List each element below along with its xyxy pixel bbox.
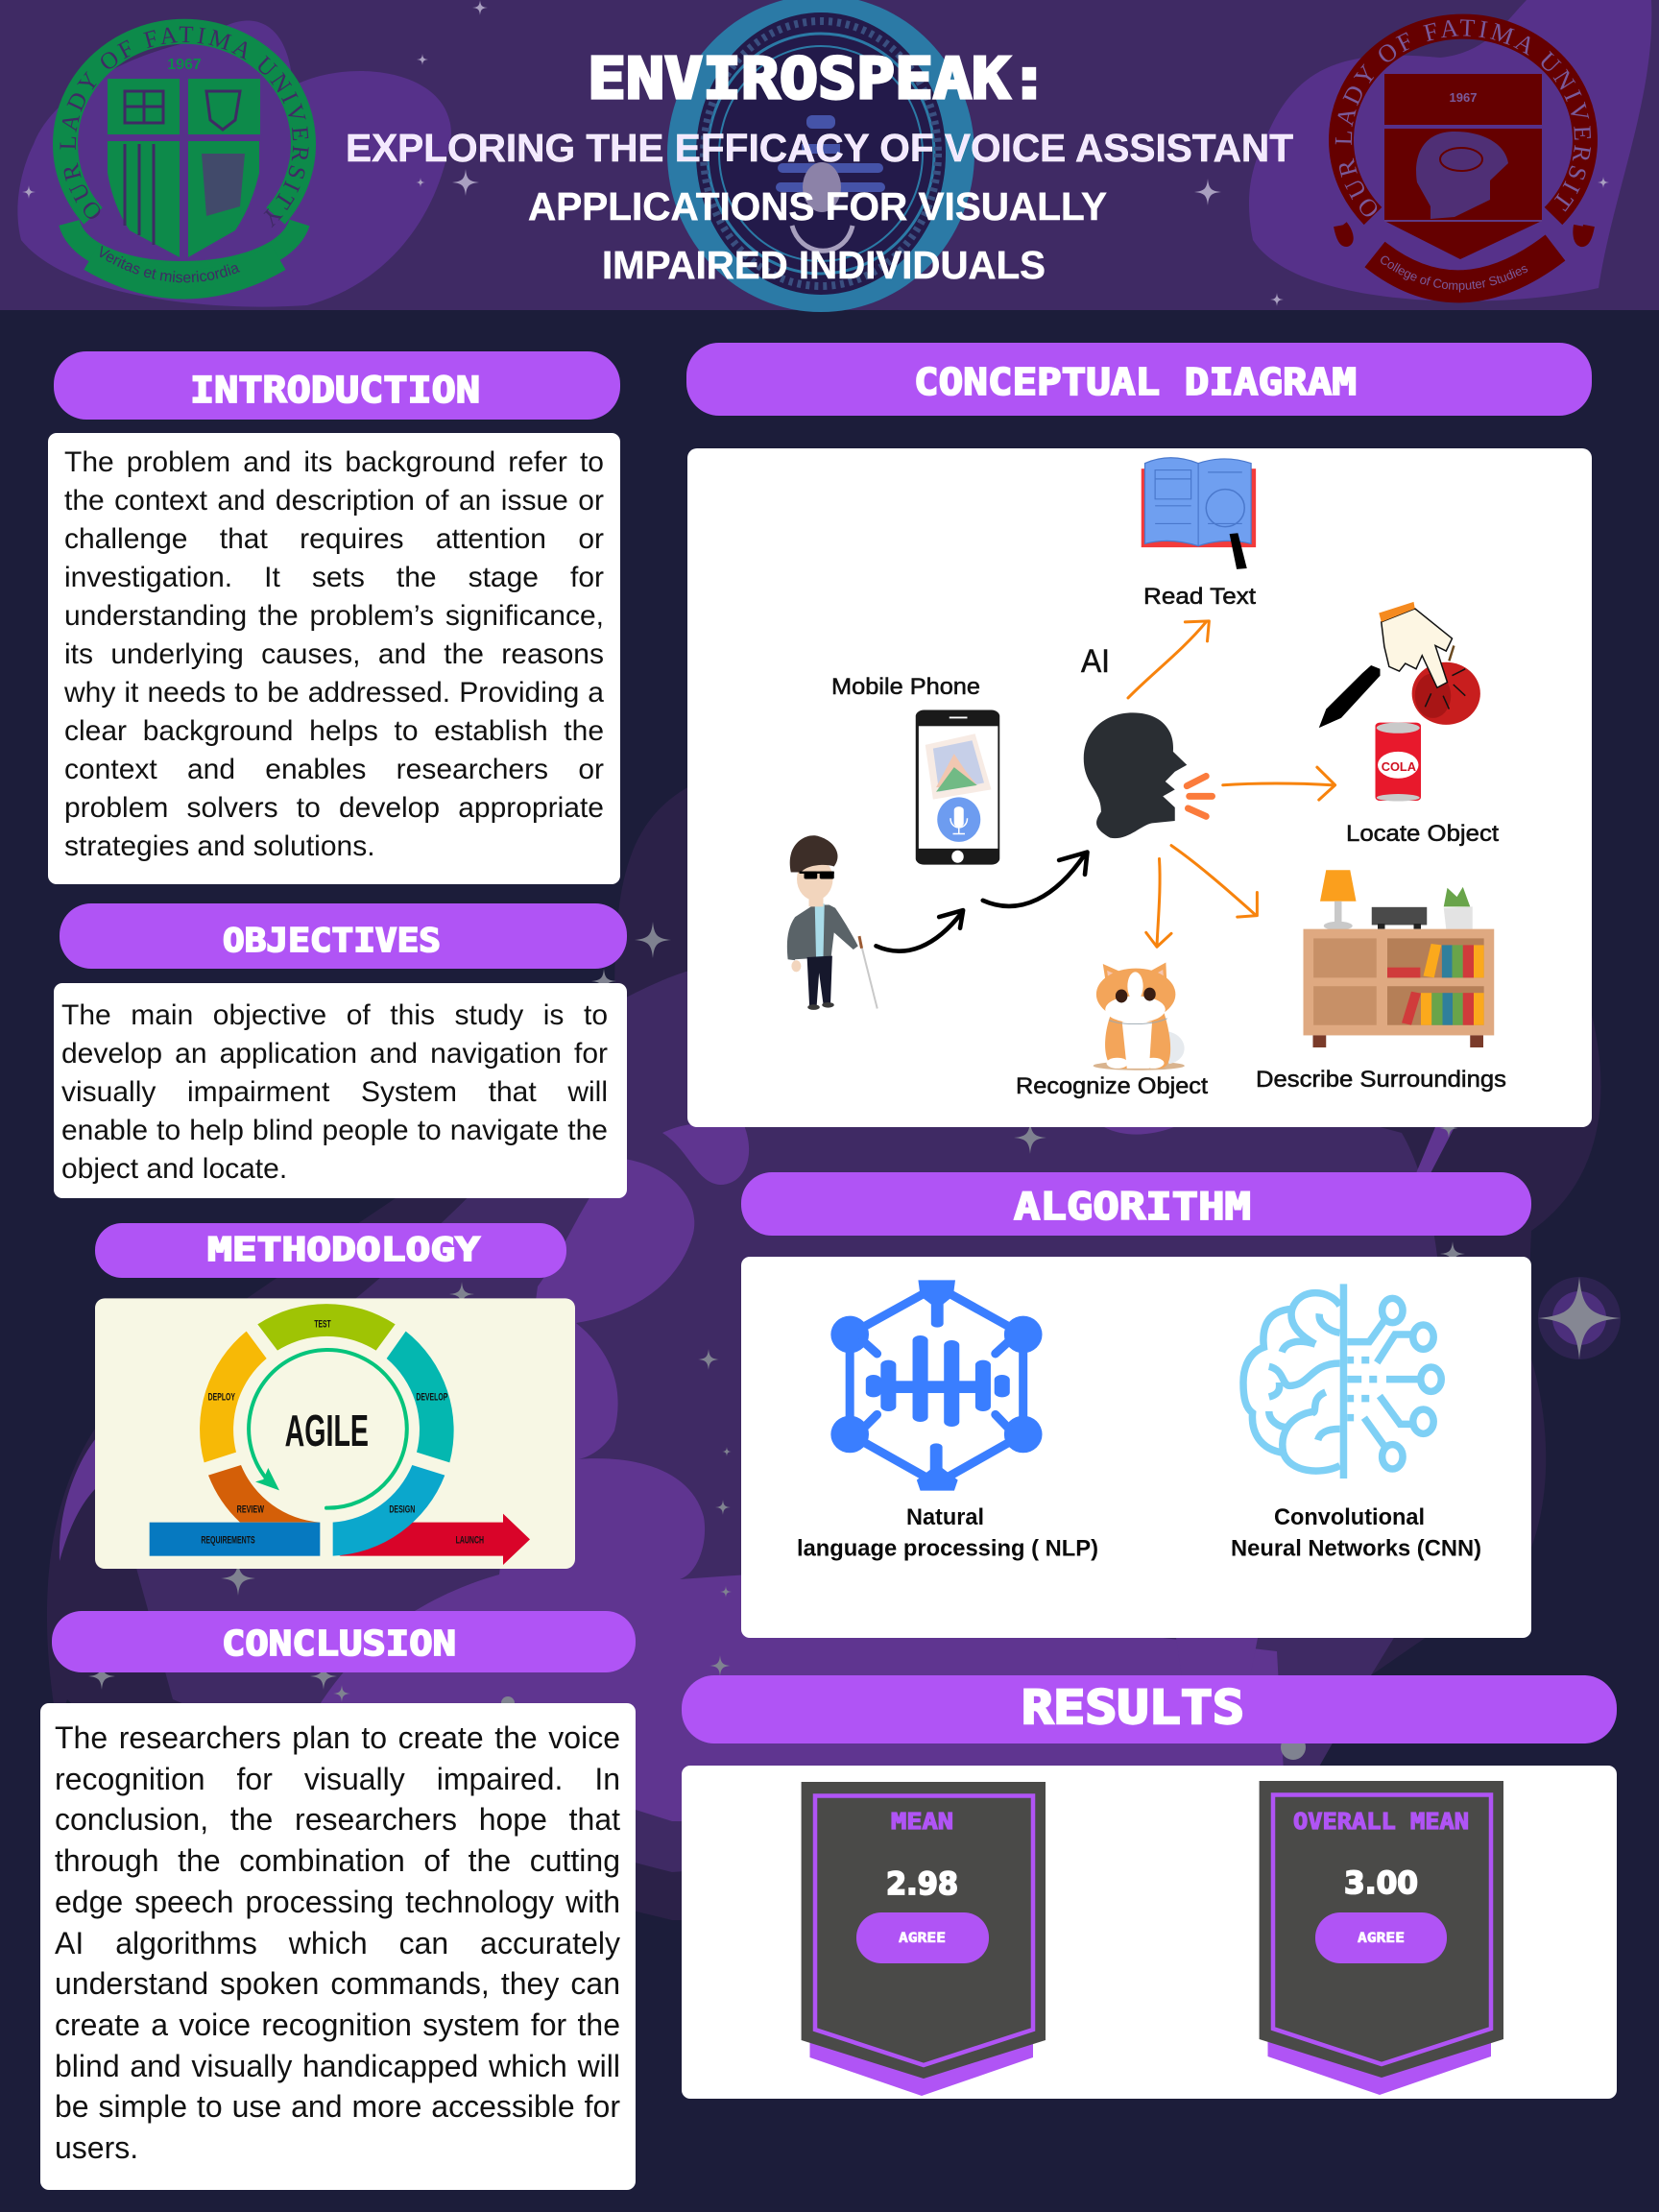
algorithm labels: Convolutional: [1274, 1504, 1425, 1530]
conclusion text: [55, 1718, 620, 2178]
badge: mean: AGREE: [899, 1931, 946, 1946]
conceptual diagram heading: CONCEPTUAL DIAGRAM: [914, 361, 1357, 403]
introduction text: clear background helps to establish the: [64, 715, 604, 747]
diagram card: [687, 448, 1592, 1127]
agile diagram: AGILE: [285, 1406, 369, 1455]
right college seal: College of Computer Studies: [1381, 255, 1528, 292]
diagram labels: Read Text: [1143, 584, 1256, 610]
introduction text: its underlying causes, and the reasons: [64, 638, 604, 670]
methodology heading: [95, 1223, 566, 1278]
badge: mean: [802, 1782, 1046, 2096]
icon: head speaking: [1084, 712, 1212, 838]
panel: objectives: [54, 903, 627, 1198]
panel: methodology: [95, 1223, 575, 1569]
objectives heading: OBJECTIVES: [223, 922, 441, 960]
conclusion text: create a voice recognition system for the: [55, 2008, 620, 2042]
objectives card: [54, 983, 627, 1198]
icon: pointing hand, pen and apple: [1319, 602, 1480, 728]
icon: brain circuit: [1243, 1284, 1441, 1479]
diagram labels: Describe Surroundings: [1256, 1067, 1506, 1093]
decorative stars: [88, 922, 1465, 1702]
algorithm card: [741, 1257, 1531, 1638]
agile diagram: [95, 1298, 575, 1569]
agile diagram: TEST: [314, 1319, 331, 1331]
right college seal: 1967: [1450, 90, 1477, 105]
badge: mean: MEAN: [891, 1810, 953, 1835]
conclusion text: blind and visually handicapped which will: [55, 2049, 620, 2083]
introduction text: strategies and solutions.: [64, 830, 375, 862]
panel: conceptual diagram: [686, 343, 1592, 1127]
title: ENVIROSPEAK:: [588, 45, 1048, 111]
large glowing star: [1538, 1277, 1621, 1359]
panel: algorithm: [741, 1172, 1531, 1638]
introduction text: problem solvers to develop appropriate: [64, 792, 604, 824]
introduction text: The problem and its background refer to: [64, 446, 604, 478]
header banner: [0, 0, 1659, 312]
left university seal: Veritas et misericordia: [100, 246, 240, 282]
introduction card: [48, 433, 620, 884]
results heading: [682, 1675, 1617, 1743]
icon: NLP network: [830, 1280, 1043, 1491]
header nebula: [17, 0, 1651, 307]
introduction text: investigation. It sets the stage for: [64, 562, 604, 593]
diagram labels: [831, 584, 1506, 1099]
algorithm labels: [797, 1504, 1481, 1561]
introduction text: why it needs to be addressed. Providing a: [64, 677, 604, 709]
background nebula: [47, 768, 1601, 1920]
conceptual diagram heading: [686, 343, 1592, 416]
left university seal: 1967: [167, 57, 202, 73]
arrows: black inputs: [876, 853, 1087, 951]
algorithm labels: Neural Networks (CNN): [1231, 1536, 1481, 1561]
agile diagram: DESIGN: [389, 1504, 415, 1516]
objectives text: enable to help blind people to navigate the: [61, 1115, 608, 1146]
conclusion text: understand spoken commands, they can: [55, 1966, 620, 2001]
objectives text: develop an application and navigation for: [61, 1038, 608, 1070]
objectives text: [61, 997, 608, 1193]
introduction heading: INTRODUCTION: [190, 370, 480, 411]
diagram labels: Recognize Object: [1016, 1073, 1208, 1099]
agile diagram: REVIEW: [237, 1504, 264, 1516]
conclusion heading: CONCLUSION: [222, 1624, 456, 1664]
conclusion text: recognition for visually impaired. In: [55, 1762, 620, 1796]
algorithm labels: language processing ( NLP): [797, 1536, 1098, 1561]
objectives text: The main objective of this study is to: [61, 999, 608, 1031]
conclusion text: through the combination of the cutting: [55, 1843, 620, 1878]
icon: cat: [1094, 963, 1185, 1070]
icon: open book: [1142, 458, 1256, 569]
badge: overall mean: OVERALL MEAN: [1293, 1810, 1469, 1835]
panel: results: [682, 1675, 1617, 2099]
agile diagram: DEPLOY: [208, 1392, 235, 1404]
diagram artwork: [787, 458, 1494, 1070]
conclusion text: AI algorithms which can accurately: [55, 1926, 620, 1960]
seal ribbon left: [69, 223, 300, 272]
badge: mean: 2.98: [886, 1865, 958, 1902]
conclusion text: edge speech processing technology with: [55, 1885, 620, 1919]
subtitle: EXPLORING THE EFFICACY OF VOICE ASSISTANT: [346, 126, 1293, 170]
conclusion text: users.: [55, 2130, 138, 2165]
objectives text: visually impairment System that will: [61, 1076, 608, 1108]
small header stars: [22, 0, 1609, 306]
conclusion text: conclusion, the researchers hope that: [55, 1802, 620, 1837]
panel: introduction: [48, 351, 620, 884]
introduction heading: [54, 351, 620, 420]
conclusion text: The researchers plan to create the voice: [55, 1720, 620, 1755]
icon: cola can: COLA: [1382, 760, 1416, 774]
introduction text: [64, 444, 604, 871]
right college seal: [1329, 13, 1598, 303]
diagram labels: AI: [1081, 643, 1110, 680]
icon: mobile phone: [916, 710, 999, 865]
algorithm heading: [741, 1172, 1531, 1236]
conclusion heading: [52, 1611, 636, 1672]
introduction text: context and enables researchers or: [64, 754, 604, 785]
subtitle: APPLICATIONS FOR VISUALLY: [528, 184, 1107, 228]
seal shield left: [108, 79, 260, 257]
agile diagram: LAUNCH: [456, 1535, 484, 1547]
icon: bookshelf with lamp: [1304, 870, 1494, 1047]
introduction text: understanding the problem’s significance,: [64, 600, 604, 632]
introduction text: challenge that requires attention or: [64, 523, 604, 555]
objectives text: object and locate.: [61, 1153, 287, 1185]
left university seal: OUR LADY OF FATIMA UNIVERSITY: [60, 27, 309, 228]
conclusion card: [40, 1703, 636, 2190]
icon: cola can: [1375, 723, 1421, 802]
algorithm labels: Natural: [906, 1504, 984, 1530]
diagram labels: Locate Object: [1346, 821, 1499, 847]
methodology heading: METHODOLOGY: [207, 1231, 481, 1269]
badge: overall mean: [1260, 1781, 1503, 2095]
subtitle: [346, 126, 1293, 287]
objectives heading: [60, 903, 627, 969]
arrows: orange outputs: [1128, 621, 1335, 947]
badge: overall mean: AGREE: [1358, 1931, 1405, 1946]
algorithm heading: ALGORITHM: [1014, 1186, 1251, 1229]
icon: blind person with cane: [787, 835, 878, 1010]
results heading: RESULTS: [1022, 1681, 1244, 1735]
results card: [682, 1766, 1617, 2099]
agile diagram: DEVELOP: [416, 1392, 448, 1404]
introduction text: the context and description of an issue or: [64, 485, 604, 517]
agile diagram: REQUIREMENTS: [201, 1535, 255, 1547]
subtitle: IMPAIRED INDIVIDUALS: [602, 243, 1046, 287]
center emblem: [667, 0, 974, 312]
diagram labels: Mobile Phone: [831, 674, 980, 700]
panel: conclusion: [40, 1611, 636, 2190]
agile launch arrow: [339, 1514, 530, 1565]
conclusion text: be simple to use and more accessible for: [55, 2089, 620, 2124]
badge: overall mean: 3.00: [1344, 1864, 1418, 1901]
